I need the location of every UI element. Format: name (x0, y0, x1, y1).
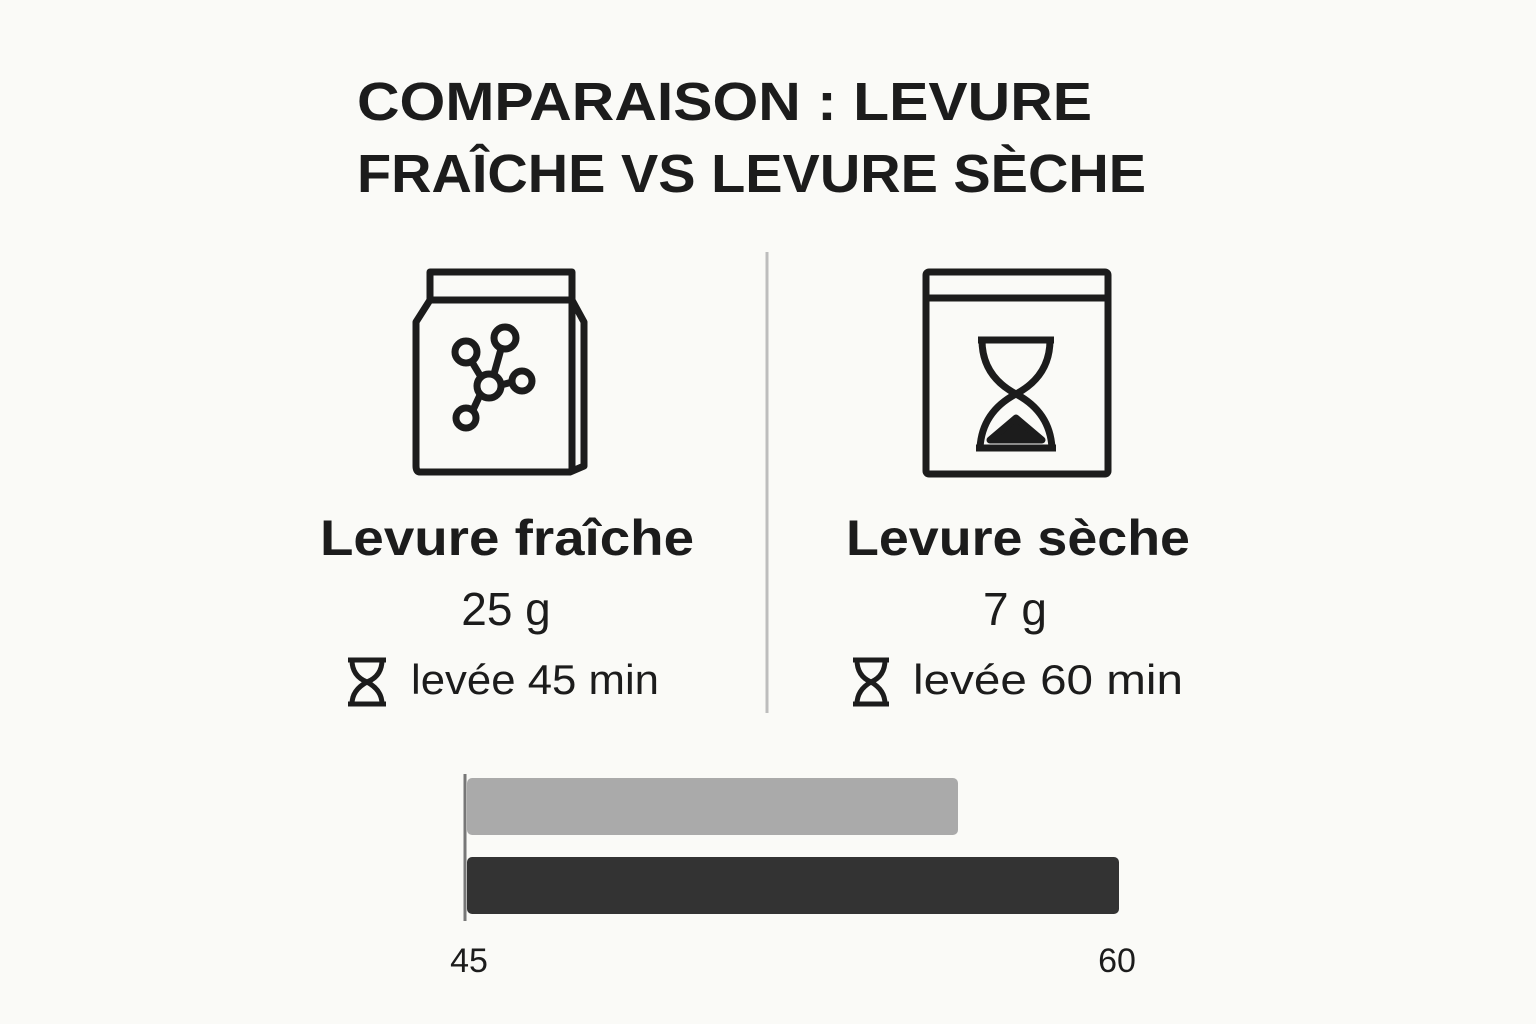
heading: Levure sèche: Levure sèche (846, 510, 1190, 566)
bar: fresh 45 (467, 778, 958, 835)
title: COMPARAISON : LEVURE (357, 72, 1092, 132)
icon: dry yeast pack (926, 272, 1108, 474)
panel: levure fraiche (320, 272, 694, 704)
amount: 7 g: 7 g (983, 583, 1047, 635)
axis label 60: 60 (1098, 942, 1136, 980)
title (357, 72, 1146, 204)
amount: 25 g: 25 g (461, 583, 551, 635)
panel: levure seche (846, 272, 1190, 704)
rise time 45 min: levée 45 min (411, 656, 659, 703)
heading: Levure fraîche: Levure fraîche (320, 510, 694, 566)
bar chart (450, 774, 1136, 980)
rise time 60 min: levée 60 min (913, 656, 1183, 703)
bar: dry 60 (467, 857, 1119, 914)
icon: fresh yeast bag (416, 272, 584, 472)
axis label 45: 45 (450, 942, 488, 980)
title: FRAÎCHE VS LEVURE SÈCHE (357, 143, 1146, 204)
